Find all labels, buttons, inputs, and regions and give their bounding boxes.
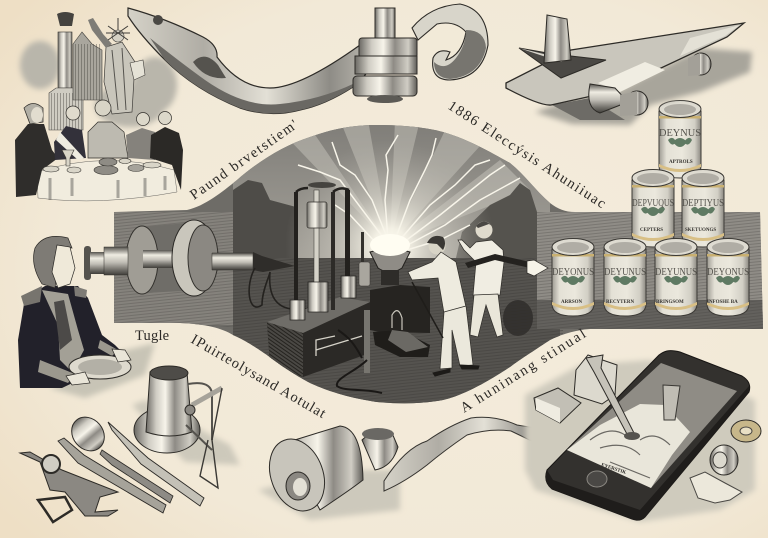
worker one [408, 236, 479, 376]
shadow hatching [525, 360, 755, 522]
ring [710, 445, 738, 475]
ornate scissors [20, 452, 118, 522]
can: middle right: DEPTIYUS [682, 198, 724, 209]
can: bottom one: DEYONUS [552, 267, 594, 278]
statue [88, 18, 145, 114]
airplane [506, 15, 752, 125]
can: bottom two [604, 238, 646, 316]
worker two [458, 222, 504, 337]
dark shrub [503, 300, 533, 336]
commander with plate [18, 236, 155, 398]
ground [233, 258, 560, 410]
column [49, 12, 83, 130]
can: middle left: DEPVUQUS [632, 198, 674, 209]
spatula [586, 355, 634, 436]
head [34, 236, 75, 288]
right building [455, 183, 537, 262]
can: bottom three: BRINGSOM [656, 300, 684, 305]
coin [731, 420, 761, 442]
ladle and lower ribbon [362, 417, 566, 491]
clouds [20, 41, 177, 127]
blocks [534, 355, 617, 423]
can: top [659, 100, 701, 178]
caption: upper left: Paund brvetstiem' [187, 117, 301, 203]
can: bottom four: INFOSHE BA [707, 300, 738, 305]
crumpled foil [690, 472, 742, 503]
sky [233, 120, 550, 258]
knife [108, 422, 204, 506]
plate shadow [50, 343, 155, 398]
caption: upper right: 1886 Eleccýsis Ahuniiuac [445, 98, 609, 212]
metal roll [258, 426, 400, 520]
can: middle left: CEPTERS [640, 228, 663, 233]
table settings [43, 150, 161, 174]
building [73, 32, 102, 100]
machine cylinder [126, 220, 310, 309]
caption: lower right: A huninang stinual [458, 326, 589, 416]
phone body [546, 351, 750, 520]
shadow [535, 48, 752, 125]
can: top: DEYNUS [659, 128, 701, 139]
right floor strip [537, 212, 763, 320]
can: bottom three [655, 238, 697, 316]
can: bottom three: DEYUNUS [655, 267, 697, 278]
screen [567, 363, 737, 488]
spoon [65, 411, 173, 503]
fork [58, 438, 166, 513]
crucible [370, 234, 410, 285]
panel: central electrolysis scene [110, 120, 768, 410]
cylinder [353, 8, 417, 103]
can: middle left [632, 170, 674, 247]
can: bottom two: RECYTERN [606, 300, 634, 305]
stacked aluminium cans [552, 100, 749, 316]
engines [620, 53, 711, 116]
can: middle right: SKETUONGS [685, 228, 716, 233]
banquet figures [15, 100, 183, 197]
caption: lower left: IPuirteolysand Aotulat [188, 332, 329, 422]
tablecloth [37, 160, 177, 201]
glass [663, 385, 680, 420]
wing [506, 23, 744, 105]
left building [233, 180, 296, 262]
pour rod [465, 254, 530, 268]
ribbon main [128, 8, 380, 114]
apparatus stand [267, 182, 382, 393]
machine shaft end [84, 246, 128, 280]
cutlery [20, 411, 204, 522]
home button [587, 471, 607, 487]
tail stabilizer [519, 48, 606, 78]
can: bottom one [552, 238, 594, 316]
dark control box [370, 285, 430, 357]
coat [18, 286, 122, 388]
top-left scene: statue and banquet [15, 12, 183, 201]
nacelle [589, 84, 628, 113]
plate [69, 355, 131, 379]
light rays [293, 125, 530, 230]
can: bottom two: DEYUNUS [604, 267, 646, 278]
pour arrow [527, 260, 548, 276]
can: bottom four [707, 238, 749, 316]
curl [412, 4, 488, 80]
can: bottom four: DEYONUS [707, 267, 749, 278]
top ribbon with cylinder [128, 4, 488, 114]
can: bottom one: ARRSON [561, 300, 583, 305]
can: middle right [682, 170, 724, 247]
can: top: APTROLS [669, 160, 693, 165]
caption: Tugle: Tugle [135, 328, 169, 344]
lightning bolts [298, 135, 520, 252]
light burst [294, 157, 486, 258]
mug with clamp [132, 366, 240, 488]
label on screen: EYERSTIK [600, 463, 627, 476]
smartphone scene [525, 351, 761, 522]
tail fin [544, 15, 571, 63]
